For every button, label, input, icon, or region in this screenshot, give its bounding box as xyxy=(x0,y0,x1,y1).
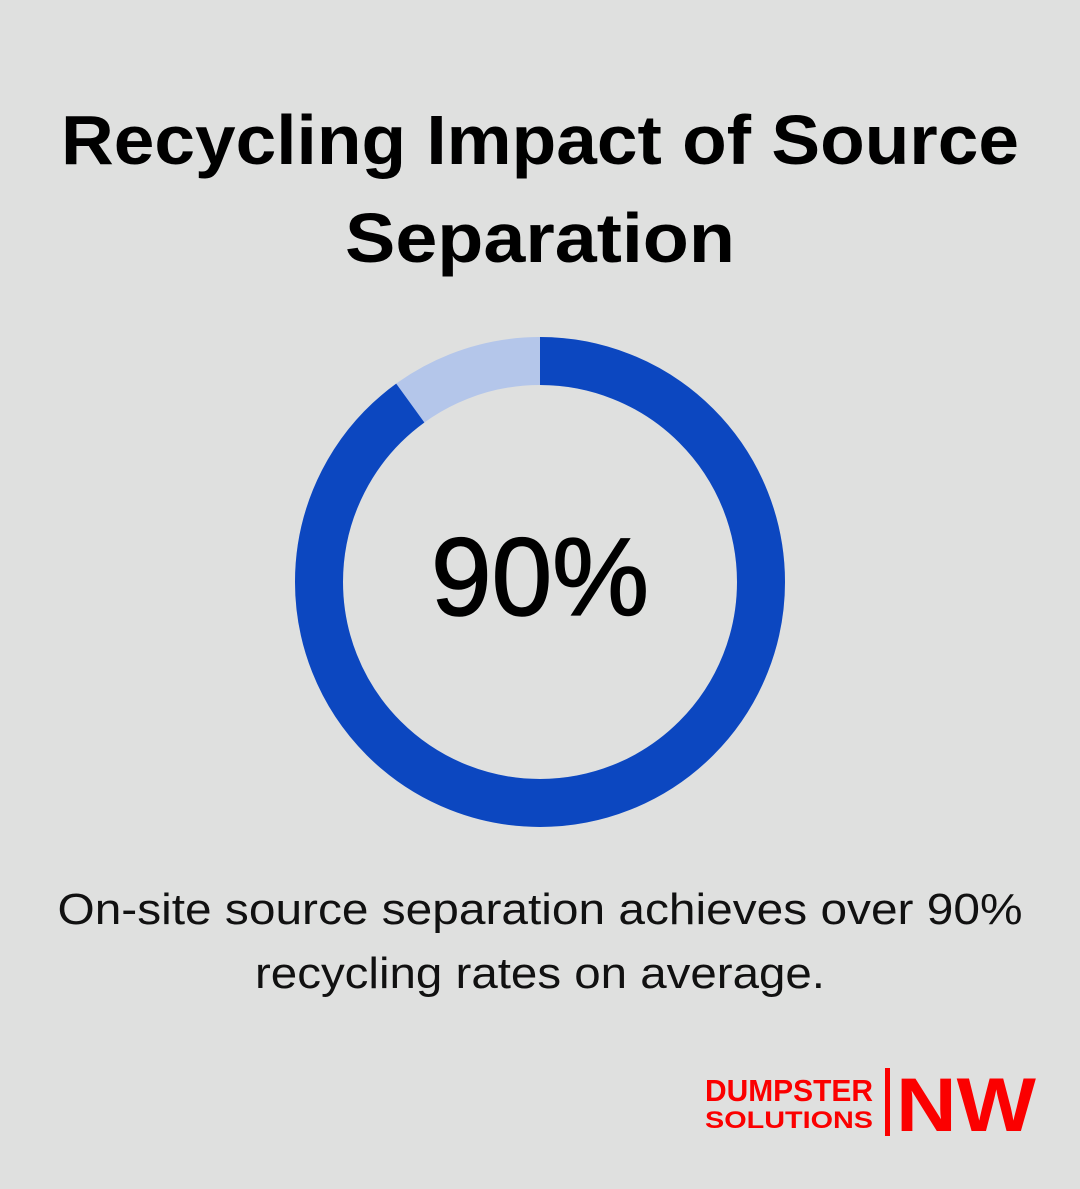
description text xyxy=(58,885,1022,998)
title: Separation xyxy=(345,199,735,277)
donut chart xyxy=(319,361,761,803)
title: Recycling Impact of Source xyxy=(61,101,1019,179)
center value: 90% xyxy=(431,516,649,639)
description text: recycling rates on average. xyxy=(255,949,825,998)
logo xyxy=(705,1063,1036,1148)
description text: On-site source separation achieves over 90% xyxy=(58,885,1022,934)
title xyxy=(61,101,1019,277)
logo: NW xyxy=(896,1063,1036,1148)
logo: DUMPSTER xyxy=(705,1073,873,1108)
logo: SOLUTIONS xyxy=(705,1107,873,1134)
